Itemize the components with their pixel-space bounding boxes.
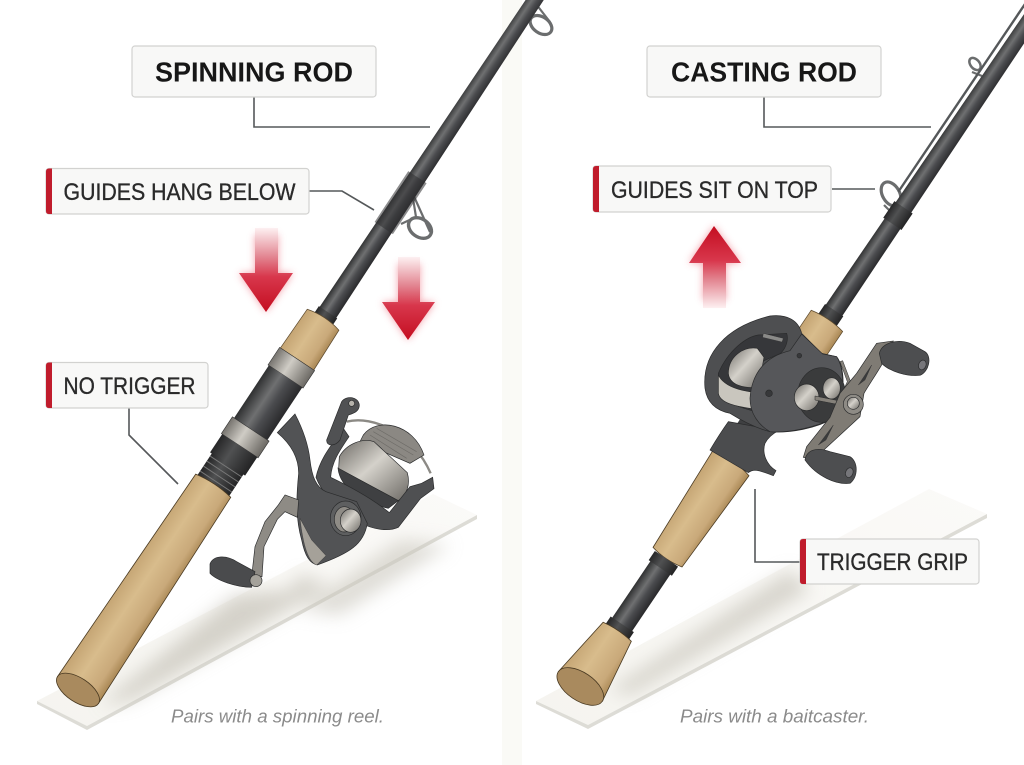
reel seat [234, 365, 302, 440]
star lever [815, 361, 851, 405]
spinning rod [51, 0, 562, 714]
reel seat under reel [718, 340, 821, 471]
spinning rod guides [401, 4, 555, 243]
heading: casting rod: CASTING ROD [671, 56, 857, 88]
platform: spinning rod base [37, 494, 477, 730]
bail arm [327, 398, 359, 445]
upper cork [790, 309, 844, 363]
silver ring lower [221, 417, 269, 458]
label: guides sit on top [593, 166, 831, 212]
handle nut [843, 394, 863, 414]
leader line: casting rod [764, 97, 931, 127]
spinning reel [210, 398, 434, 587]
arrow: guides hang below left [239, 228, 293, 312]
spool skirt [360, 425, 424, 463]
handle arm [252, 495, 299, 577]
handle knob [210, 557, 255, 587]
upper knob [879, 341, 929, 376]
label: guides hang below: GUIDES HANG BELOW [64, 179, 296, 206]
handle arm [803, 341, 893, 459]
drag recess [798, 368, 846, 422]
label: trigger grip: TRIGGER GRIP [817, 549, 968, 576]
parallel line above blank [898, 0, 1024, 192]
heading: casting rod [647, 46, 881, 97]
casting reel [705, 316, 929, 484]
label: trigger grip [800, 539, 979, 584]
leader line: guides sit on top [832, 188, 875, 190]
rotor arm [316, 428, 434, 530]
butt cork [558, 616, 640, 701]
side plate [750, 334, 843, 432]
silver ring upper [268, 347, 315, 388]
butt cap [551, 660, 610, 713]
leader line: trigger grip [755, 489, 800, 562]
caption: spinning reel: Pairs with a spinning reel. [171, 706, 384, 726]
leader line: guides hang below [309, 191, 374, 210]
bail wire [347, 420, 431, 473]
platform: casting rod base [536, 489, 987, 729]
butt cap [51, 666, 105, 714]
leader line: spinning rod [254, 97, 430, 127]
rod blank [319, 0, 550, 319]
label: guides sit on top: GUIDES SIT ON TOP [611, 177, 818, 204]
rod blank [825, 0, 1024, 317]
spool body [339, 440, 408, 501]
rear shaft [606, 551, 678, 640]
label: guides hang below [46, 168, 309, 214]
lower knob [805, 449, 856, 484]
casting rod [551, 0, 1024, 713]
threads [196, 453, 244, 498]
leader line: no trigger [129, 408, 178, 484]
heading: spinning rod: SPINNING ROD [155, 56, 353, 88]
reel window [718, 333, 787, 411]
label: no trigger: NO TRIGGER [64, 373, 196, 400]
casting rod guides [877, 56, 983, 214]
reel stem and body [277, 414, 367, 565]
trigger foot [710, 422, 778, 476]
heading: spinning rod [132, 46, 376, 97]
rear cork grip [58, 471, 235, 704]
knurled collar [210, 434, 257, 476]
hub [330, 501, 361, 536]
body highlight [300, 518, 326, 565]
spool [728, 348, 764, 388]
caption: baitcaster: Pairs with a baitcaster. [680, 706, 869, 726]
upper cork [280, 307, 341, 370]
main cork grip [648, 449, 751, 571]
arrow: guides hang below right [382, 257, 435, 340]
reel frame [705, 316, 843, 432]
arrow: guides sit on top [689, 226, 741, 308]
label: no trigger [46, 362, 208, 408]
